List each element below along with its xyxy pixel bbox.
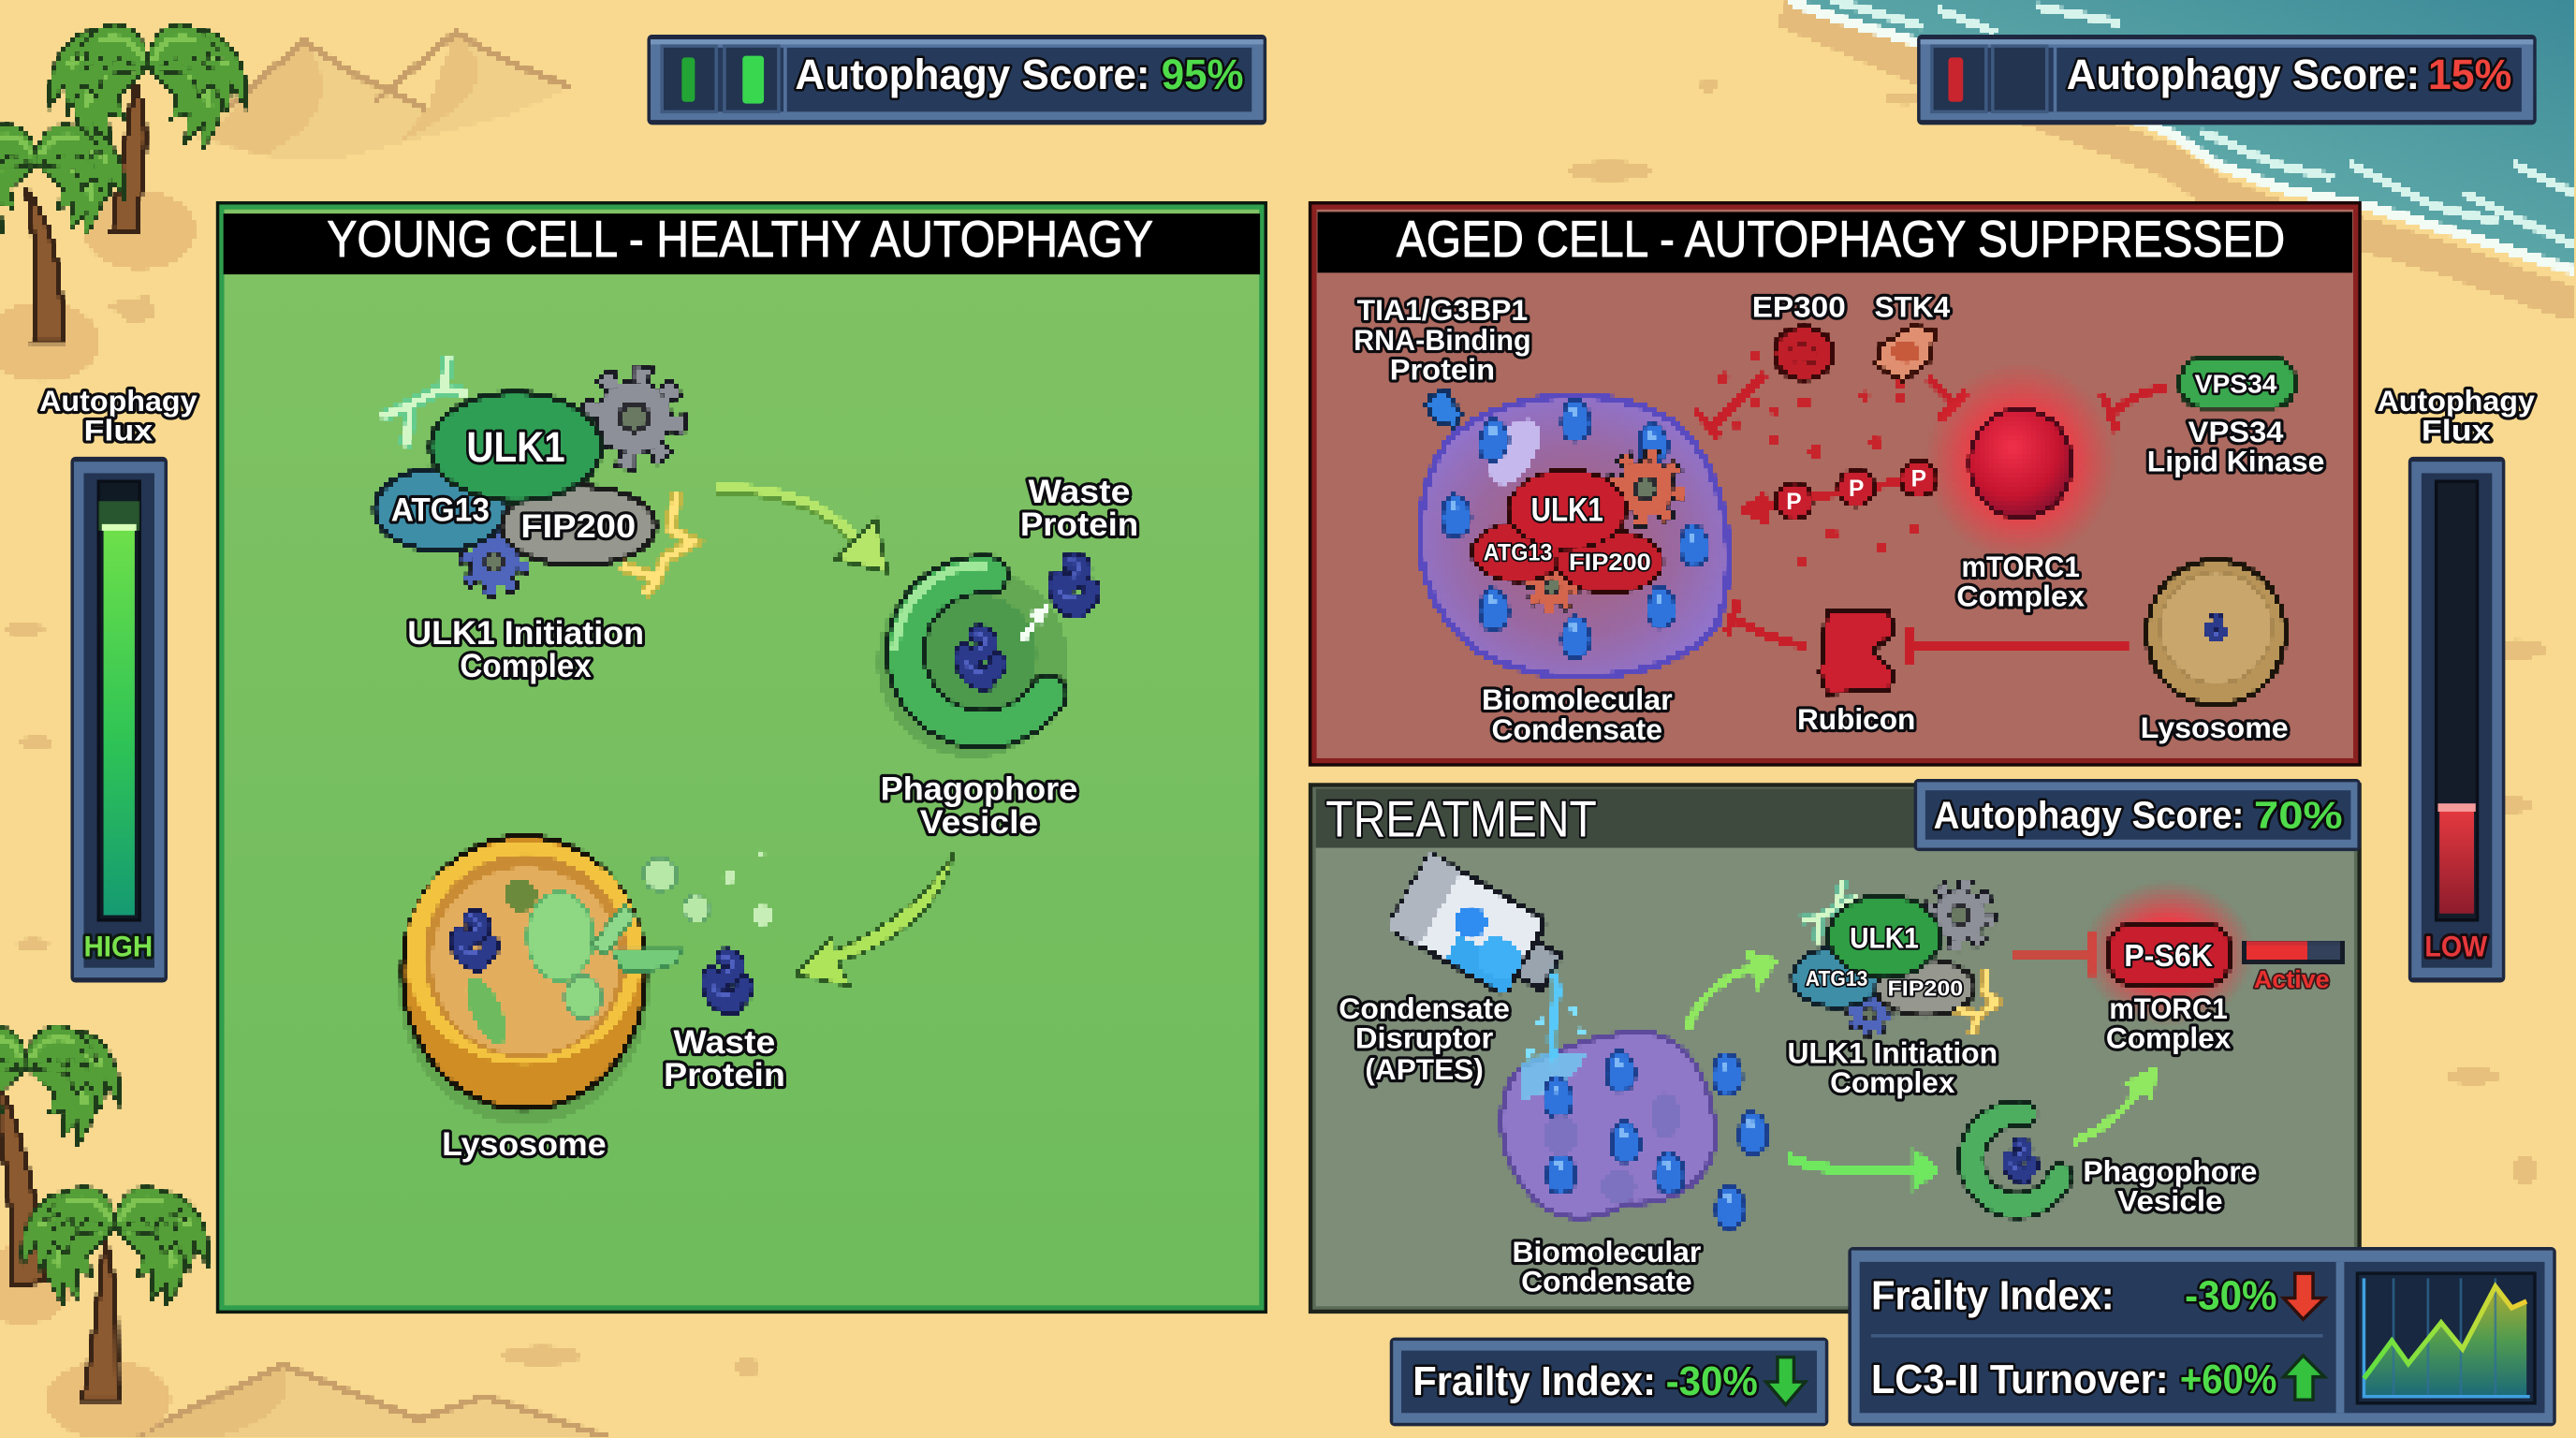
label: condensate disruptor: (APTES) bbox=[1365, 1052, 1484, 1086]
panel: treatment bbox=[1310, 785, 2359, 1311]
panel frame bbox=[1310, 204, 2359, 764]
icon: yellow spark bbox=[621, 492, 694, 594]
icon: APTES bottle bbox=[1387, 854, 1573, 1009]
meter: active bbox=[2244, 942, 2343, 962]
inhibit: VPS34 to mTORC1 bbox=[2102, 386, 2169, 433]
arrow: white bbox=[1018, 605, 1048, 642]
label: waste protein lower: Waste bbox=[674, 1024, 775, 1061]
FIP200 text: FIP200 bbox=[1887, 976, 1963, 1001]
label: EP300: EP300 bbox=[1752, 290, 1846, 324]
level slots bbox=[1932, 46, 2047, 111]
panel frame bbox=[1310, 785, 2359, 1311]
icon: biomolecular condensate with ULK1 complex bbox=[1420, 396, 1728, 677]
icon: red down arrow bbox=[2283, 1273, 2324, 1319]
gauge label: Flux bbox=[84, 413, 154, 447]
score text: 95% bbox=[1162, 51, 1244, 98]
stats panel bbox=[1848, 1247, 2556, 1426]
label: waste protein: Waste bbox=[1029, 474, 1130, 510]
panel frame bbox=[218, 204, 1265, 1311]
flux gauge: high: HIGH bbox=[84, 929, 153, 962]
frailty index bar: -30% bbox=[1666, 1358, 1758, 1404]
pill: VPS34 bbox=[2180, 359, 2295, 407]
label: mTORC1 complex: mTORC1 bbox=[2109, 991, 2228, 1025]
inhibit: rubicon to condensate bbox=[1727, 601, 1806, 646]
label: phagophore vesicle: Vesicle bbox=[920, 804, 1038, 841]
label: mTORC1 complex: Complex bbox=[1956, 580, 2086, 613]
label: biomolecular condensate bbox=[1512, 1235, 1701, 1298]
label: mTORC1 complex: Complex bbox=[2106, 1021, 2232, 1055]
label: biomolecular condensate: Biomolecular bbox=[1512, 1235, 1701, 1269]
icon: lysosome bbox=[399, 836, 772, 1123]
label: mTORC1 complex bbox=[2106, 991, 2232, 1055]
red particles bbox=[1718, 349, 1918, 565]
icon: teal spark bbox=[1800, 881, 1856, 943]
label: biomolecular condensate: Condensate bbox=[1521, 1264, 1692, 1298]
label: VPS34 lipid kinase: Lipid Kinase bbox=[2147, 445, 2324, 478]
label: STK4: STK4 bbox=[1874, 290, 1951, 324]
icon: grey gear bbox=[1930, 886, 1989, 945]
FIP200 text: FIP200 bbox=[1569, 550, 1651, 576]
protein: ULK1 bbox=[1828, 895, 1940, 977]
label: waste protein bbox=[1020, 474, 1138, 543]
palm tree: bottom left bbox=[0, 1013, 121, 1325]
icon: green up arrow bbox=[2283, 1356, 2324, 1400]
frailty row: Frailty Index: bbox=[1871, 1273, 2115, 1319]
label: ULK1 initiation complex: Complex bbox=[1830, 1065, 1955, 1099]
FIP200 text: FIP200 bbox=[520, 508, 636, 545]
arrow: complex to phagophore bbox=[714, 488, 887, 572]
gear salmon bbox=[1613, 455, 1679, 521]
score text: Autophagy Score: bbox=[795, 51, 1149, 98]
label: waste protein: Protein bbox=[1020, 506, 1138, 543]
icon: waste protein bbox=[1058, 560, 1091, 609]
flux gauge: high bbox=[39, 384, 198, 982]
level slots bbox=[662, 46, 779, 111]
flux gauge: low bbox=[2377, 384, 2535, 982]
line chart bbox=[2357, 1273, 2535, 1403]
icon: condensate dissolving bbox=[1501, 1032, 1715, 1217]
gauge label: Autophagy bbox=[39, 384, 198, 418]
labels and HUD: treatment bbox=[1339, 779, 2556, 1426]
inhibit: STK4 to mTORC1 bbox=[1928, 378, 1967, 420]
LC3-II row: +60% bbox=[2180, 1357, 2276, 1402]
label: mTORC1 complex: mTORC1 bbox=[1961, 550, 2080, 583]
pill: P-S6K bbox=[2083, 881, 2254, 1025]
icon: mTORC1 sphere bbox=[1925, 363, 2115, 560]
ATG13 text: ATG13 bbox=[1806, 966, 1867, 990]
icon: green down arrow bbox=[1766, 1357, 1806, 1405]
label: rubicon: Rubicon bbox=[1797, 702, 1915, 736]
icon: blue droplets released bbox=[1713, 1053, 1768, 1228]
arrow: to phagophore bbox=[1787, 1147, 1940, 1193]
ATG13 text: ATG13 bbox=[391, 492, 490, 528]
label: VPS34 lipid kinase bbox=[2147, 415, 2324, 478]
VPS34 pill text: VPS34 bbox=[2195, 369, 2277, 398]
arrow: to mTORC1 bbox=[2073, 1064, 2157, 1142]
P chain arrow bbox=[1738, 460, 1937, 526]
autophagy score bar: treatment bbox=[1914, 779, 2361, 851]
phosphate labels: P bbox=[1849, 477, 1864, 502]
label: ULK1 initiation complex bbox=[1787, 1035, 1998, 1099]
label: VPS34 lipid kinase: VPS34 bbox=[2188, 415, 2284, 448]
icon: lysosome degraded bbox=[2147, 560, 2285, 705]
label: active: Active bbox=[2254, 965, 2330, 993]
green fill bbox=[98, 501, 139, 916]
label: biomolecular condensate bbox=[1482, 682, 1673, 746]
icon: phagophore vesicle bbox=[877, 565, 1068, 757]
icon: waste protein near lysosome bbox=[710, 956, 744, 1005]
label: waste protein lower: Protein bbox=[664, 1057, 785, 1093]
label: ULK1 initiation complex: ULK1 Initiation bbox=[1787, 1035, 1998, 1069]
icon: teal spark bbox=[381, 357, 466, 447]
score text: Autophagy Score: bbox=[2067, 51, 2420, 98]
dunes bottom bbox=[131, 1365, 607, 1438]
autophagy score bar: treatment: Autophagy Score: bbox=[1934, 794, 2244, 837]
inhibit: lysosome to rubicon bbox=[1909, 626, 2128, 666]
gauge label bbox=[2377, 384, 2535, 447]
phosphate labels: P bbox=[1911, 466, 1926, 492]
arrow: phagophore to lysosome bbox=[795, 855, 953, 986]
protein: ULK1 bbox=[431, 392, 601, 501]
frailty index bar bbox=[1390, 1338, 1828, 1426]
inhibit: EP300 to condensate bbox=[1695, 374, 1764, 437]
gauge label: Autophagy bbox=[2377, 384, 2535, 418]
frailty index bar: Frailty Index: bbox=[1412, 1358, 1656, 1404]
label: phagophore vesicle bbox=[2083, 1154, 2257, 1217]
LC3-II row: LC3-II Turnover: bbox=[1871, 1357, 2169, 1402]
labels: young cell bbox=[391, 423, 1138, 1163]
label: phagophore vesicle: Vesicle bbox=[2117, 1183, 2223, 1217]
label: phagophore vesicle: Phagophore bbox=[881, 771, 1077, 808]
label: ULK1 initiation complex: ULK1 Initiation bbox=[407, 615, 644, 652]
arrow: to ULK1 complex bbox=[1687, 949, 1779, 1029]
illustrations: aged cell bbox=[1420, 325, 2295, 705]
LC3-II row bbox=[1871, 1356, 2324, 1402]
label: condensate disruptor: Disruptor bbox=[1355, 1021, 1493, 1055]
protein: ATG13 bbox=[1793, 948, 1881, 1007]
autophagy score bar: young bbox=[647, 35, 1266, 125]
autophagy score bar: treatment: 70% bbox=[2254, 794, 2343, 837]
label: biomolecular condensate: Condensate bbox=[1492, 712, 1662, 746]
score text: 15% bbox=[2428, 51, 2511, 98]
label: ULK1 initiation complex: Complex bbox=[460, 648, 592, 684]
red fill bbox=[2437, 803, 2476, 914]
icon: TIA1/G3BP1 blue protein bbox=[1426, 391, 1460, 427]
label: TIA1/G3BP1: RNA-Binding bbox=[1354, 323, 1531, 357]
palm tree: bottom centre bbox=[21, 1174, 210, 1438]
panel: aged cell bbox=[1310, 204, 2359, 764]
label: waste protein lower bbox=[664, 1024, 785, 1093]
icon: yellow spark bbox=[1954, 969, 1998, 1035]
icon: grey gear bbox=[591, 374, 677, 461]
icon: blue gear bbox=[1851, 995, 1888, 1033]
label: condensate disruptor bbox=[1339, 991, 1510, 1086]
ATG13 text: ATG13 bbox=[1484, 540, 1552, 565]
gauge label bbox=[39, 384, 198, 447]
icon: blue gear bbox=[466, 533, 523, 591]
heading bar: AGED CELL - AUTOPHAGY SUPPRESSED bbox=[1397, 211, 2285, 268]
phosphate labels bbox=[1786, 466, 1926, 515]
label: lysosome: Lysosome bbox=[442, 1126, 607, 1163]
label: TIA1/G3BP1: TIA1/G3BP1 bbox=[1357, 293, 1528, 327]
phosphate labels: P bbox=[1786, 490, 1802, 515]
label: lysosome: Lysosome bbox=[2141, 711, 2289, 744]
P-S6K text: P-S6K bbox=[2124, 939, 2213, 974]
protein: FIP200 bbox=[1876, 960, 1975, 1016]
label: phagophore vesicle: Phagophore bbox=[2083, 1154, 2257, 1188]
frailty row: -30% bbox=[2185, 1273, 2276, 1319]
flux gauge: low: LOW bbox=[2424, 929, 2487, 962]
icon: EP300 bbox=[1774, 327, 1834, 379]
ULK1 text: ULK1 bbox=[466, 423, 565, 471]
inhibit: ULK1 to P-S6K bbox=[2012, 933, 2093, 976]
palm tree: top right bbox=[48, 11, 248, 270]
icon: STK4 bbox=[1876, 325, 1935, 381]
illustrations: young cell bbox=[374, 357, 1091, 1123]
label: TIA1/G3BP1 bbox=[1354, 293, 1531, 386]
label: phagophore vesicle bbox=[881, 771, 1077, 841]
heading bar bbox=[1316, 788, 1917, 848]
sea with foam bbox=[1782, 0, 2576, 305]
heading bar: TREATMENT bbox=[1325, 790, 1597, 847]
panel: young cell bbox=[218, 204, 1265, 1311]
gear small bbox=[1530, 564, 1575, 609]
protein: FIP200 bbox=[501, 486, 655, 565]
heading bar: YOUNG CELL - HEALTHY AUTOPHAGY bbox=[327, 211, 1153, 268]
labels: aged cell bbox=[1354, 290, 2324, 746]
palm tree: top left bbox=[0, 112, 126, 381]
illustrations: treatment bbox=[1387, 854, 2343, 1228]
label: condensate disruptor: Condensate bbox=[1339, 991, 1510, 1025]
dunes top bbox=[198, 33, 570, 161]
gauge label: Flux bbox=[2422, 413, 2491, 447]
label: biomolecular condensate: Biomolecular bbox=[1482, 682, 1673, 716]
ULK1 text: ULK1 bbox=[1531, 492, 1603, 528]
frailty row bbox=[1871, 1273, 2324, 1319]
icon: rubicon bbox=[1821, 611, 1895, 694]
stream bbox=[1525, 973, 1585, 1060]
autophagy score bar: aged bbox=[1917, 35, 2537, 125]
ULK1 text: ULK1 bbox=[1850, 921, 1919, 955]
label: ULK1 initiation complex bbox=[407, 615, 644, 684]
label: TIA1/G3BP1: Protein bbox=[1390, 352, 1495, 386]
label: mTORC1 complex bbox=[1956, 550, 2086, 613]
protein: ATG13 bbox=[374, 468, 506, 550]
icon: phagophore bbox=[1971, 1113, 2060, 1206]
